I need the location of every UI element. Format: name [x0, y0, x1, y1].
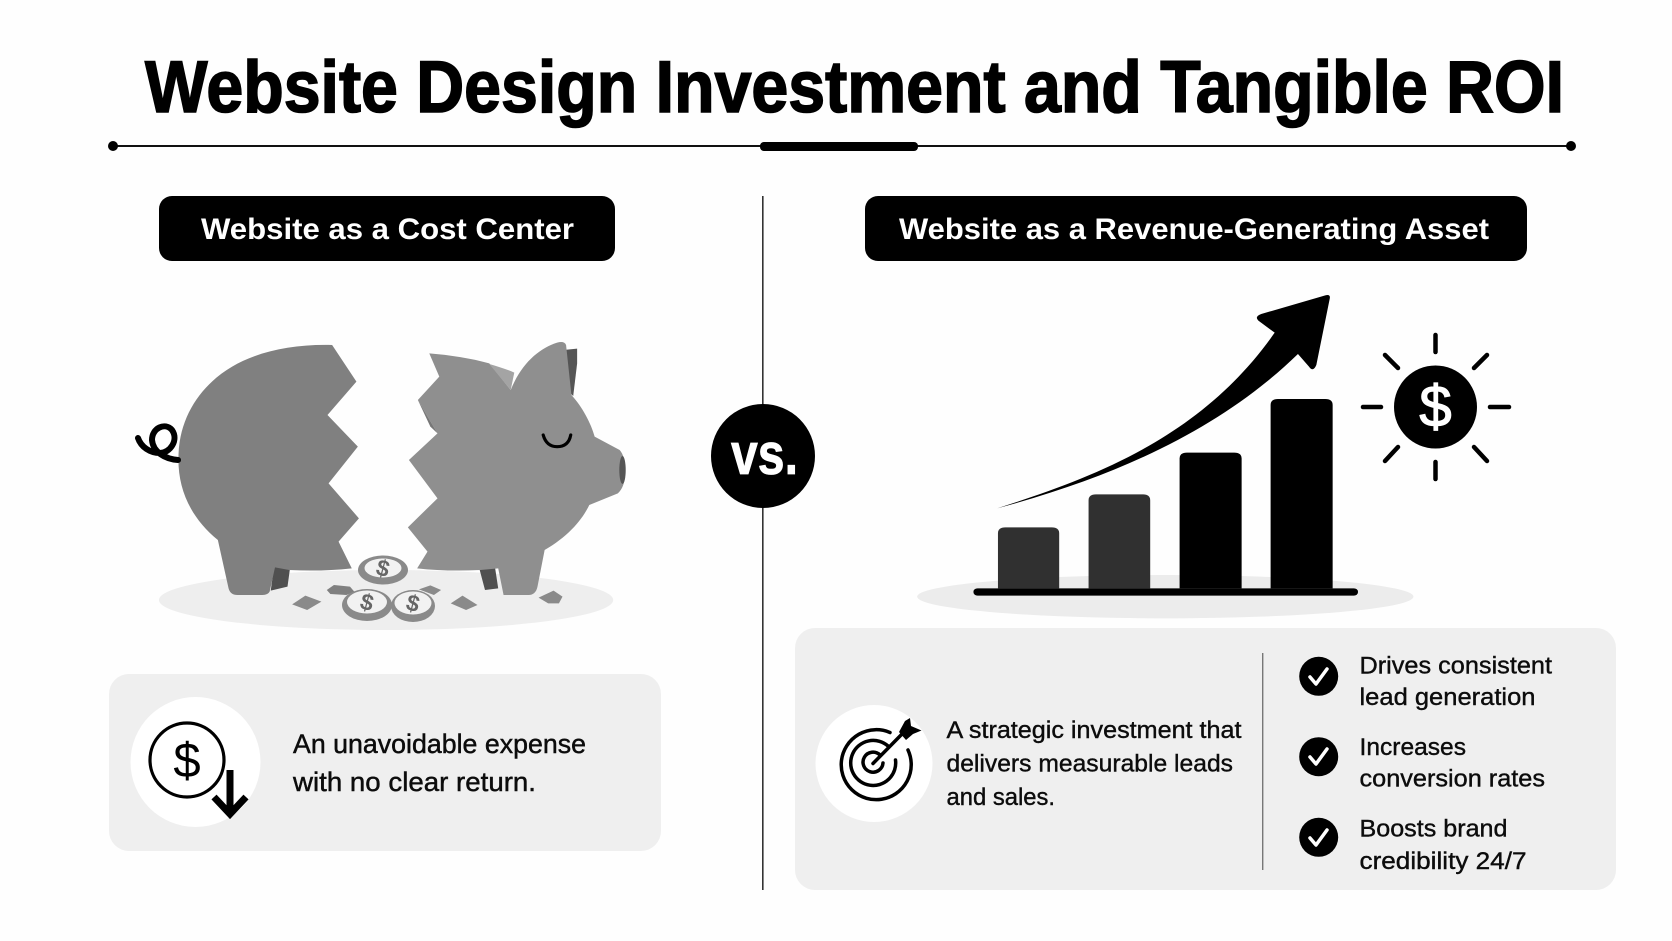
illustration: broken piggy bank	[138, 342, 626, 630]
revenue asset text: A strategic investment that	[946, 717, 1242, 744]
benefit: conversion rates: Increases	[1360, 734, 1466, 761]
benefit: brand credibility: credibility 24/7	[1360, 848, 1526, 875]
coins: $	[403, 589, 423, 617]
coins	[342, 554, 435, 622]
benefit: conversion rates: conversion rates	[1360, 766, 1545, 793]
icon: dollar falling: $	[173, 734, 201, 788]
icon: dollar sun: $	[1419, 374, 1452, 439]
benefit: brand credibility	[1299, 816, 1526, 875]
vs badge: vs.	[731, 422, 798, 487]
icon: dollar falling	[130, 697, 260, 827]
coins: $	[373, 554, 393, 582]
icon: dollar sun	[1363, 335, 1509, 479]
revenue asset text	[946, 717, 1242, 811]
revenue asset text: and sales.	[946, 784, 1055, 811]
heading: revenue asset	[865, 196, 1527, 261]
panel: cost center note	[109, 674, 661, 851]
title: Website Design Investment and Tangible ROI	[145, 47, 1564, 128]
growth arrow	[997, 295, 1330, 508]
chart: rising bars with arrow	[917, 295, 1413, 618]
cost center text: with no clear return.	[292, 767, 536, 797]
vs badge	[711, 404, 815, 508]
cost center text	[292, 729, 586, 797]
heading: cost center: Website as a Cost Center	[201, 213, 574, 246]
benefit: lead generation: lead generation	[1360, 684, 1536, 711]
heading: cost center	[159, 196, 615, 261]
cost center text: An unavoidable expense	[293, 729, 586, 759]
benefit: lead generation	[1299, 652, 1552, 711]
baseline	[973, 588, 1358, 596]
benefit: brand credibility: Boosts brand	[1360, 816, 1508, 843]
bars	[998, 399, 1333, 588]
panel: revenue asset note	[795, 628, 1616, 890]
heading: revenue asset: Website as a Revenue-Generating Asset	[899, 213, 1489, 246]
vertical divider	[762, 196, 764, 890]
coins: $	[357, 588, 377, 616]
benefit: conversion rates	[1299, 734, 1545, 793]
benefit: lead generation: Drives consistent	[1360, 652, 1552, 680]
title rule	[108, 141, 1576, 151]
revenue asset text: delivers measurable leads	[946, 750, 1233, 778]
inner divider	[1262, 653, 1263, 870]
icon: target with arrow	[816, 705, 932, 822]
pig tail	[138, 426, 178, 460]
